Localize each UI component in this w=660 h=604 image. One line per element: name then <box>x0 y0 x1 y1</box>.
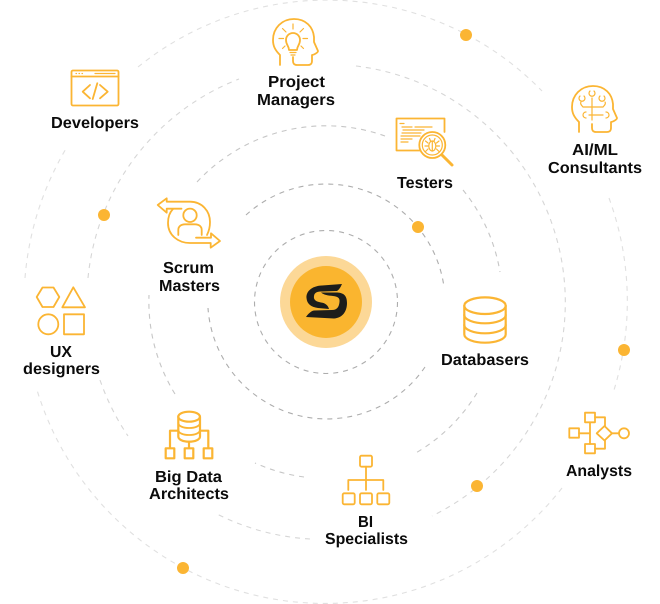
Big Data Architects: Architects <box>149 486 229 503</box>
label: BI <box>358 514 373 531</box>
icon: person with cycle arrows <box>158 198 220 248</box>
icon: flow diagram <box>569 413 629 453</box>
icon: head with circuit <box>572 86 617 132</box>
icon: database hierarchy <box>166 412 212 458</box>
icon: database cylinder <box>464 297 506 343</box>
label: Project <box>268 74 326 91</box>
Project Managers <box>257 19 335 109</box>
label: UX <box>50 344 72 361</box>
Developers <box>51 70 139 132</box>
BI Specialists <box>325 456 408 548</box>
label: Testers <box>397 175 453 192</box>
Scrum Masters <box>158 198 220 295</box>
icon: code window <box>72 70 118 106</box>
Databasers <box>441 297 529 369</box>
central logo <box>280 256 372 348</box>
icon: org chart <box>343 456 389 504</box>
icon: geometric shapes <box>37 287 85 334</box>
label: Scrum <box>163 260 214 277</box>
AI/ML Consultants: Consultants <box>548 160 642 177</box>
BI Specialists: Specialists <box>325 531 408 548</box>
Big Data Architects <box>149 412 229 503</box>
icon: head with light bulb <box>273 19 318 65</box>
label: Analysts <box>566 463 632 480</box>
Analysts <box>566 413 632 480</box>
label: Developers <box>51 115 139 132</box>
Testers <box>396 118 453 192</box>
icon: code sheet and magnifier with bug <box>396 118 452 165</box>
label: AI/ML <box>572 142 618 159</box>
label: Big Data <box>155 469 222 486</box>
UX designers <box>23 287 100 378</box>
orbit dots <box>98 29 630 574</box>
Project Managers: Managers <box>257 92 335 109</box>
label: Databasers <box>441 352 529 369</box>
UX designers: designers <box>23 361 100 378</box>
Scrum Masters: Masters <box>159 278 220 295</box>
AI/ML Consultants <box>548 86 642 177</box>
